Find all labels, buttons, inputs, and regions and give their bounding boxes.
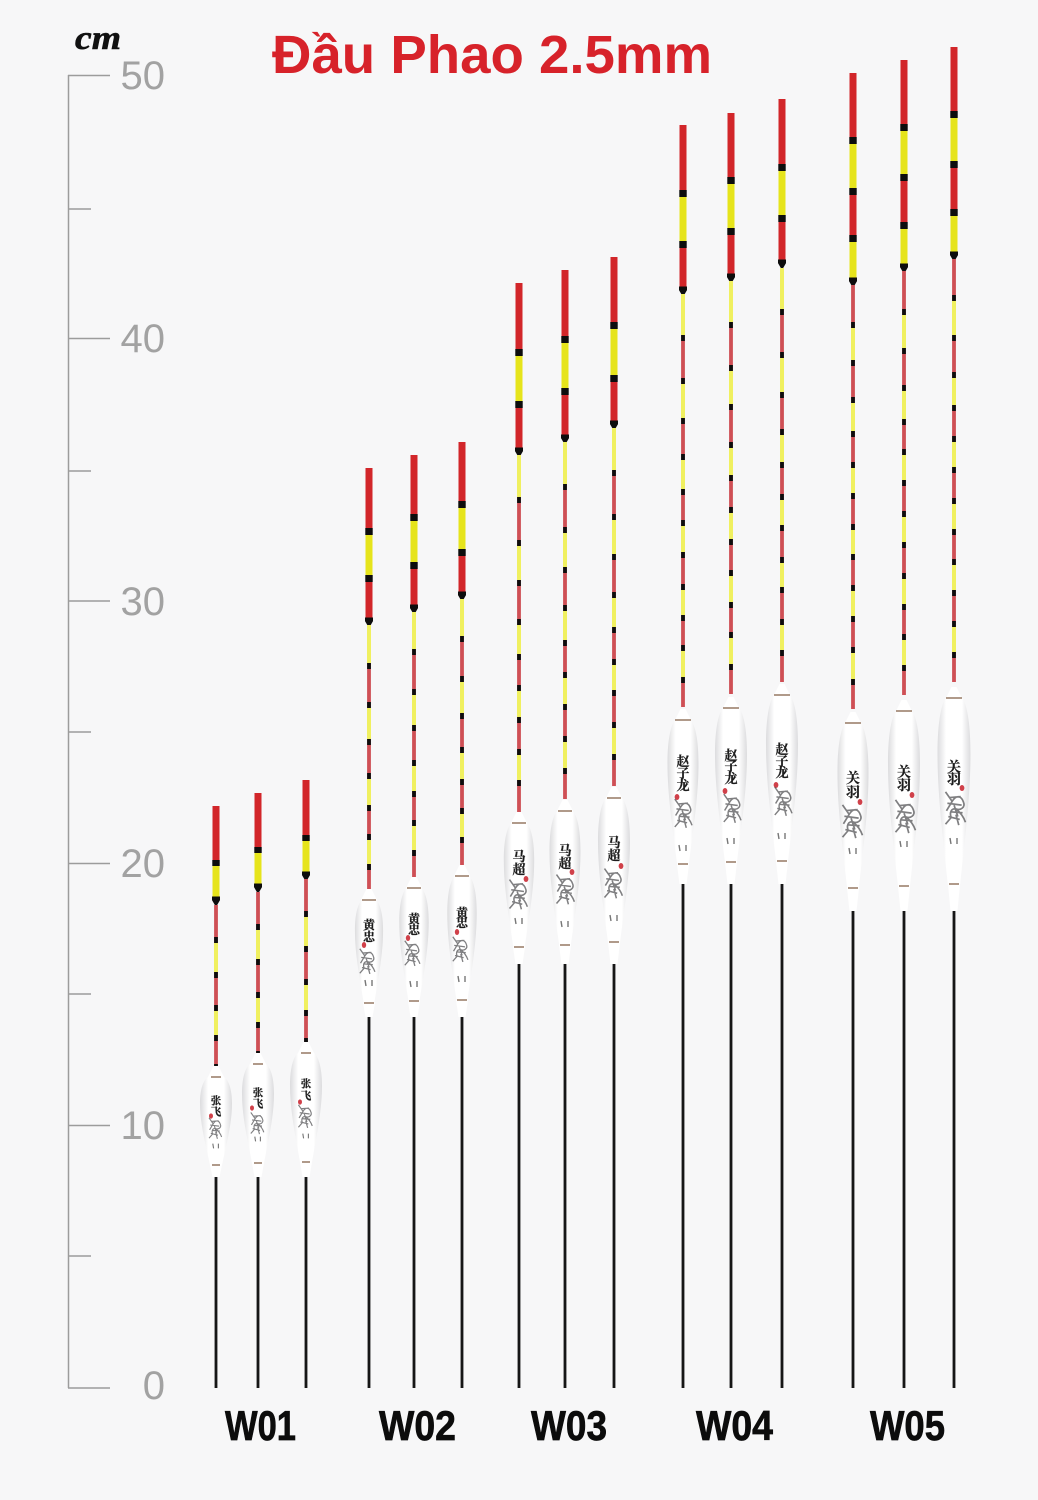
- float W05 long: 关: [947, 759, 961, 776]
- float W01 long: [290, 780, 322, 1388]
- float W01 short: 飞: [211, 1106, 222, 1118]
- float W04 medium: 子: [724, 759, 738, 774]
- float W02 long: [447, 442, 477, 1388]
- group W02 floats: [355, 442, 477, 1388]
- float W05 short: 关: [846, 770, 860, 787]
- float W05 medium: [888, 60, 920, 1388]
- float W04 long: 赵: [775, 742, 789, 757]
- float W03 medium: 超: [558, 856, 572, 871]
- float W05 long: [938, 47, 970, 1388]
- title: Đầu Phao 2.5mm: [272, 25, 712, 85]
- float W03 long: 超: [607, 848, 621, 863]
- label W05: W05: [870, 1402, 945, 1449]
- float W03 short: [504, 283, 534, 1388]
- float W05 medium: 关: [897, 764, 911, 781]
- float W01 short: [200, 806, 232, 1388]
- scale axis: 20: [120, 842, 165, 886]
- float W04 short: 龙: [676, 778, 690, 793]
- group W01 floats: [200, 780, 322, 1388]
- float W02 short: 黄: [363, 917, 377, 932]
- float W03 medium: [549, 270, 581, 1388]
- float W05 short: [837, 73, 869, 1388]
- scale axis: 0: [143, 1364, 165, 1408]
- scale axis: 30: [120, 580, 165, 624]
- float W04 short: 子: [676, 766, 690, 781]
- float W01 medium: 飞: [253, 1098, 264, 1110]
- float W02 short: 忠: [363, 929, 376, 944]
- float W01 short: 张: [211, 1094, 222, 1107]
- unit label: cm: cm: [75, 20, 121, 57]
- float W02 short: [355, 468, 383, 1388]
- float W04 long: 子: [775, 754, 789, 769]
- label W04: W04: [696, 1402, 774, 1449]
- float W01 medium: [242, 793, 274, 1388]
- float W01 medium: 张: [253, 1086, 264, 1099]
- float W03 long: [598, 257, 630, 1388]
- scale axis: [68, 54, 165, 1408]
- float W05 medium: 羽: [897, 778, 911, 794]
- scale axis: 50: [120, 54, 165, 98]
- label W03: W03: [531, 1402, 607, 1449]
- float W03 short: 马: [512, 849, 526, 864]
- float W03 short: 超: [512, 862, 526, 877]
- group W05 floats: [837, 47, 970, 1388]
- float W03 medium: 马: [558, 843, 572, 858]
- float W04 medium: 赵: [724, 748, 738, 763]
- float W02 long: 黄: [456, 905, 470, 920]
- float W04 long: 龙: [775, 765, 789, 780]
- group W03 floats: [504, 257, 630, 1388]
- float W03 long: 马: [607, 835, 621, 850]
- float W02 medium: 黄: [408, 911, 422, 926]
- float W02 medium: [399, 455, 429, 1388]
- float W05 short: 羽: [846, 785, 860, 801]
- float W04 long: [766, 99, 798, 1388]
- float W02 long: 忠: [456, 915, 469, 930]
- label W02: W02: [379, 1402, 456, 1449]
- group W04 floats: [667, 99, 798, 1388]
- float W01 long: 飞: [301, 1090, 312, 1102]
- float W04 short: [667, 125, 699, 1388]
- float W04 short: 赵: [676, 754, 690, 769]
- float W01 long: 张: [301, 1077, 312, 1090]
- label W01: W01: [225, 1402, 296, 1449]
- scale axis: 10: [120, 1104, 165, 1148]
- scale axis: 40: [120, 317, 165, 361]
- float W05 long: 羽: [947, 772, 961, 788]
- float W02 medium: 忠: [408, 922, 421, 937]
- float W04 medium: 龙: [724, 771, 738, 786]
- float W04 medium: [715, 113, 747, 1388]
